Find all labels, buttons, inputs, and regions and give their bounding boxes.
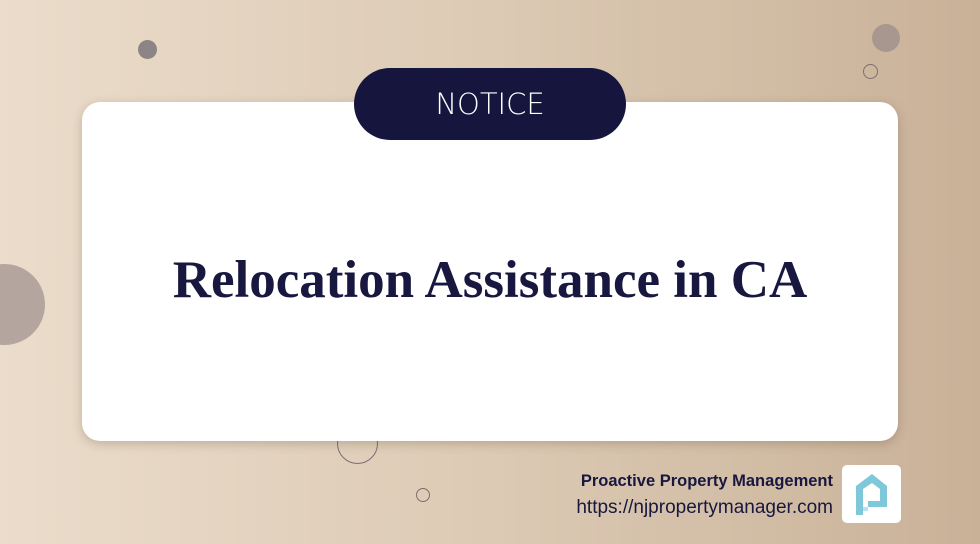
decorative ring: below card — [337, 423, 378, 464]
decorative circle: left big — [0, 264, 45, 345]
card: main white panel — [82, 102, 898, 441]
title: Relocation Assistance in CA — [173, 251, 807, 309]
logo — [842, 465, 901, 523]
decorative circle: top left — [138, 40, 157, 59]
decorative ring: top right — [863, 64, 878, 79]
website url: https://njpropertymanager.com — [576, 497, 833, 518]
notice pill: NOTICE — [435, 87, 545, 121]
decorative ring: bottom small — [416, 488, 430, 502]
decorative circle: top right — [872, 24, 900, 52]
notice pill — [354, 68, 626, 140]
company name: Proactive Property Management — [581, 472, 833, 490]
